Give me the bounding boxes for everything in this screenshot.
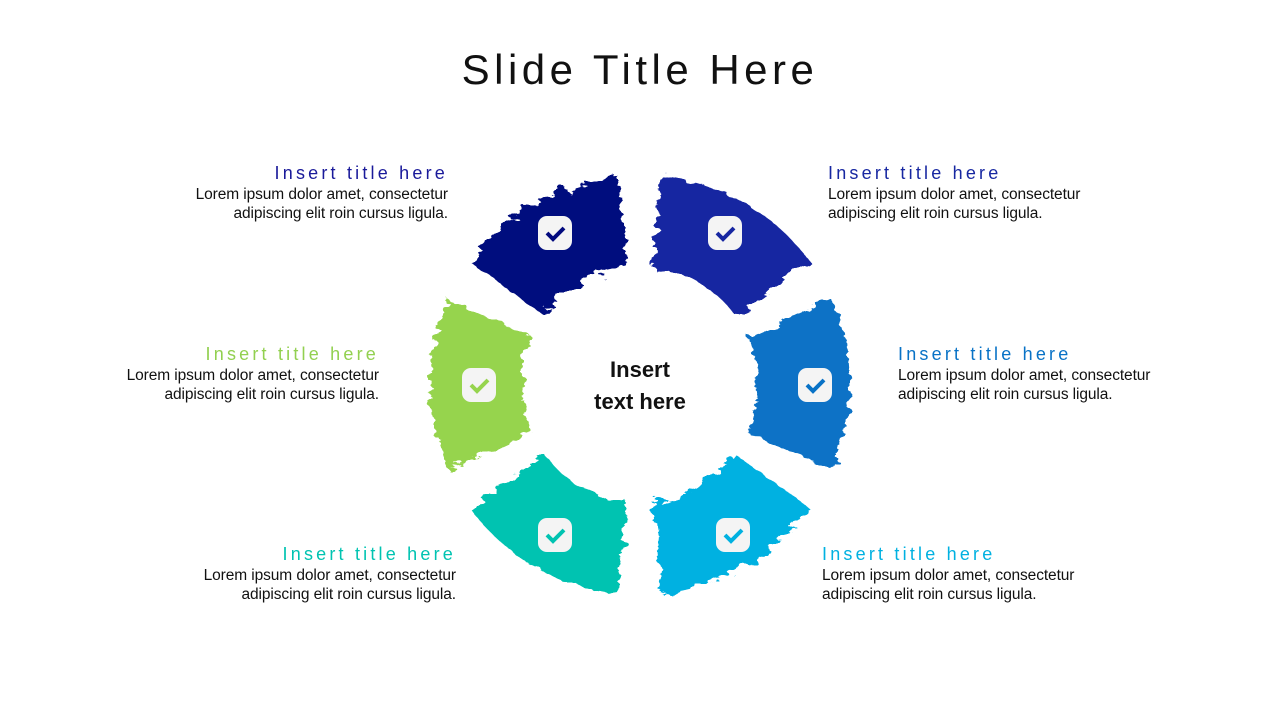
text: top left <box>196 163 448 222</box>
text: right: adipiscing elit roin cursus ligula. <box>898 386 1112 403</box>
center text <box>594 357 686 414</box>
center text: Insert <box>610 357 670 382</box>
text: bottom right <box>822 544 1074 603</box>
text: top left: adipiscing elit roin cursus ligula. <box>234 205 448 222</box>
text: top left: Insert title here <box>275 163 448 183</box>
text: bottom left: Insert title here <box>283 544 456 564</box>
segment: bottom right <box>652 454 810 594</box>
text: top right: Lorem ipsum dolor amet, consectetur <box>828 186 1080 203</box>
text: left: Insert title here <box>206 344 379 364</box>
text: bottom left: adipiscing elit roin cursus ligula. <box>242 586 456 603</box>
text: top left: Lorem ipsum dolor amet, consectetur <box>196 186 448 203</box>
text: bottom left <box>204 544 456 603</box>
text: bottom right: Lorem ipsum dolor amet, consectetur <box>822 567 1074 584</box>
segment: right <box>748 300 850 470</box>
segment: top left <box>470 176 628 316</box>
text: top right <box>828 163 1080 222</box>
segment: left <box>430 300 532 470</box>
text: bottom right: Insert title here <box>822 544 995 564</box>
text: left: adipiscing elit roin cursus ligula. <box>165 386 379 403</box>
text: left <box>127 344 379 403</box>
center text: text here <box>594 389 686 414</box>
text: bottom right: adipiscing elit roin cursus ligula. <box>822 586 1036 603</box>
text: right: Lorem ipsum dolor amet, consectetur <box>898 367 1150 384</box>
text: top right: Insert title here <box>828 163 1001 183</box>
text: right <box>898 344 1150 403</box>
text: left: Lorem ipsum dolor amet, consectetur <box>127 367 379 384</box>
segment: bottom left <box>470 454 628 594</box>
text: top right: adipiscing elit roin cursus ligula. <box>828 205 1042 222</box>
text: bottom left: Lorem ipsum dolor amet, consectetur <box>204 567 456 584</box>
title: Slide Title Here <box>462 46 818 93</box>
text: right: Insert title here <box>898 344 1071 364</box>
segment: top right <box>652 176 810 316</box>
